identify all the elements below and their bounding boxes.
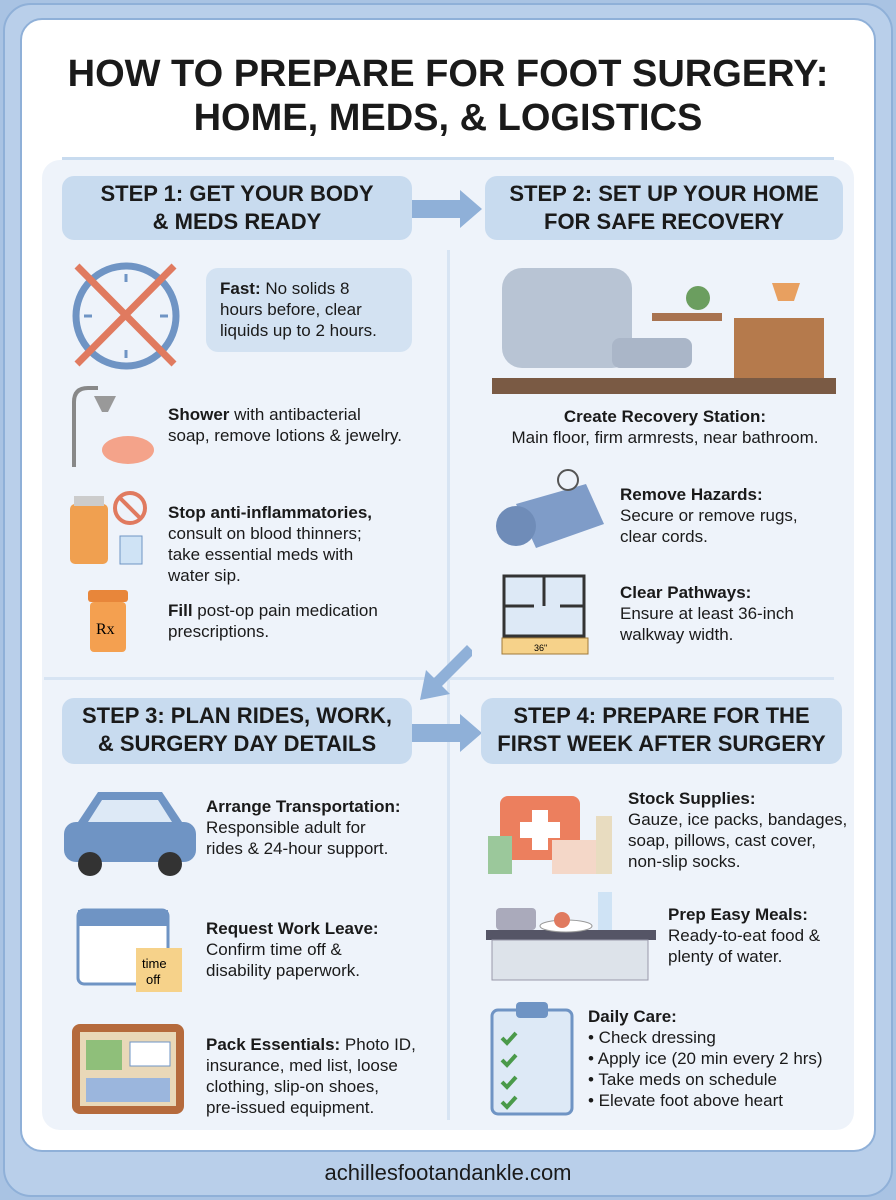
heading: step 3: & SURGERY DAY DETAILS: [98, 731, 376, 756]
icon: floor plan: 36": [534, 643, 547, 653]
text: fill prescriptions: [168, 601, 378, 641]
text: stock supplies: [628, 789, 847, 871]
text: daily care: • Elevate foot above heart: [588, 1091, 783, 1110]
text: clear pathways: walkway width.: [620, 625, 733, 644]
icon: clock no food: [72, 262, 180, 370]
text: work leave: Request Work Leave:: [206, 919, 379, 938]
heading: step 1: STEP 1: GET YOUR BODY: [100, 181, 374, 206]
heading: step 3: STEP 3: PLAN RIDES, WORK,: [82, 703, 392, 728]
text: fill prescriptions: Fill post-op pain medication: [168, 601, 378, 620]
text: stop anti-inflammatories: consult on blood thinners;: [168, 524, 362, 543]
text: daily care: • Apply ice (20 min every 2 hrs): [588, 1049, 823, 1068]
icon: car: [64, 792, 196, 876]
title: HOME, MEDS, & LOGISTICS: [194, 97, 702, 139]
text: transportation: [206, 797, 401, 858]
icon: clipboard: [490, 1002, 574, 1116]
text: pack essentials: [206, 1035, 416, 1117]
text: easy meals: [668, 905, 820, 966]
heading: step 2: [485, 176, 843, 240]
icon: calendar: [76, 908, 182, 992]
text: transportation: rides & 24-hour support.: [206, 839, 388, 858]
text: fill prescriptions: prescriptions.: [168, 622, 269, 641]
text: stock supplies: Stock Supplies:: [628, 789, 756, 808]
text: stock supplies: Gauze, ice packs, bandages,: [628, 810, 847, 829]
text: daily care: • Take meds on schedule: [588, 1070, 777, 1089]
callout: fast: [206, 268, 412, 352]
text: transportation: Arrange Transportation:: [206, 797, 401, 816]
heading: step 1: [62, 176, 412, 240]
text: daily care: [588, 1007, 823, 1110]
icon: suitcase: [72, 1024, 184, 1114]
text: pack essentials: Pack Essentials: Photo ID,: [206, 1035, 416, 1054]
text: stock supplies: soap, pillows, cast cover,: [628, 831, 816, 850]
arrow: step3 to step4: [412, 714, 481, 752]
callout: fast: liquids up to 2 hours.: [220, 321, 377, 340]
text: clear pathways: Ensure at least 36-inch: [620, 604, 794, 623]
text: recovery station: Create Recovery Station:: [564, 407, 766, 426]
heading: step 3: [62, 698, 412, 764]
text: pack essentials: pre-issued equipment.: [206, 1098, 374, 1117]
text: clear pathways: [620, 583, 794, 644]
text: stop anti-inflammatories: water sip.: [168, 566, 241, 585]
icon: calendar: time: [142, 956, 167, 971]
text: remove hazards: Secure or remove rugs,: [620, 506, 798, 525]
text: pack essentials: insurance, med list, loose: [206, 1056, 398, 1075]
text: easy meals: plenty of water.: [668, 947, 782, 966]
text: daily care: Daily Care:: [588, 1007, 677, 1026]
callout: fast: Fast: No solids 8: [220, 279, 349, 298]
icon: prescription bottle: Rx: [96, 621, 115, 638]
icon: floor plan: [502, 574, 588, 654]
text: stock supplies: non-slip socks.: [628, 852, 740, 871]
text: clear pathways: Clear Pathways:: [620, 583, 751, 602]
heading: step 2: FOR SAFE RECOVERY: [544, 209, 784, 234]
text: easy meals: Prep Easy Meals:: [668, 905, 808, 924]
text: easy meals: Ready-to-eat food &: [668, 926, 820, 945]
text: transportation: Responsible adult for: [206, 818, 366, 837]
title: HOW TO PREPARE FOR FOOT SURGERY:: [68, 53, 828, 95]
icon: first aid supplies: [488, 796, 612, 874]
footer: achillesfootandankle.com: [324, 1160, 572, 1185]
text: shower: Shower with antibacterial: [168, 405, 361, 424]
text: recovery station: [511, 407, 819, 447]
callout: fast: hours before, clear: [220, 300, 362, 319]
icon: recovery station: [492, 268, 836, 394]
arrow: step1 to step2: [412, 190, 482, 228]
heading: step 4: [481, 698, 842, 764]
text: remove hazards: Remove Hazards:: [620, 485, 763, 504]
icon: kitchen: [486, 892, 656, 980]
icon: shower: [72, 386, 154, 467]
arrow: step2 to step3: [420, 645, 472, 700]
text: shower: [168, 405, 402, 445]
title: [68, 53, 828, 139]
heading: step 2: STEP 2: SET UP YOUR HOME: [509, 181, 819, 206]
text: work leave: Confirm time off &: [206, 940, 342, 959]
text: remove hazards: clear cords.: [620, 527, 708, 546]
icon: prescription bottle: [88, 590, 128, 652]
heading: step 1: & MEDS READY: [153, 209, 321, 234]
text: work leave: [206, 919, 379, 980]
text: work leave: disability paperwork.: [206, 961, 360, 980]
heading: step 4: FIRST WEEK AFTER SURGERY: [497, 731, 826, 756]
text: pack essentials: clothing, slip-on shoes,: [206, 1077, 379, 1096]
text: stop anti-inflammatories: [168, 503, 372, 585]
icon: meds stop: [70, 491, 147, 564]
heading: step 4: STEP 4: PREPARE FOR THE: [513, 703, 810, 728]
text: recovery station: Main floor, firm armrests, near bathroom.: [511, 428, 819, 447]
text: stop anti-inflammatories: take essential meds with: [168, 545, 353, 564]
icon: calendar: off: [146, 972, 161, 987]
text: remove hazards: [620, 485, 798, 546]
text: shower: soap, remove lotions & jewelry.: [168, 426, 402, 445]
text: daily care: • Check dressing: [588, 1028, 716, 1047]
text: stop anti-inflammatories: Stop anti-inflammatories,: [168, 503, 372, 522]
icon: rug: [496, 469, 604, 548]
